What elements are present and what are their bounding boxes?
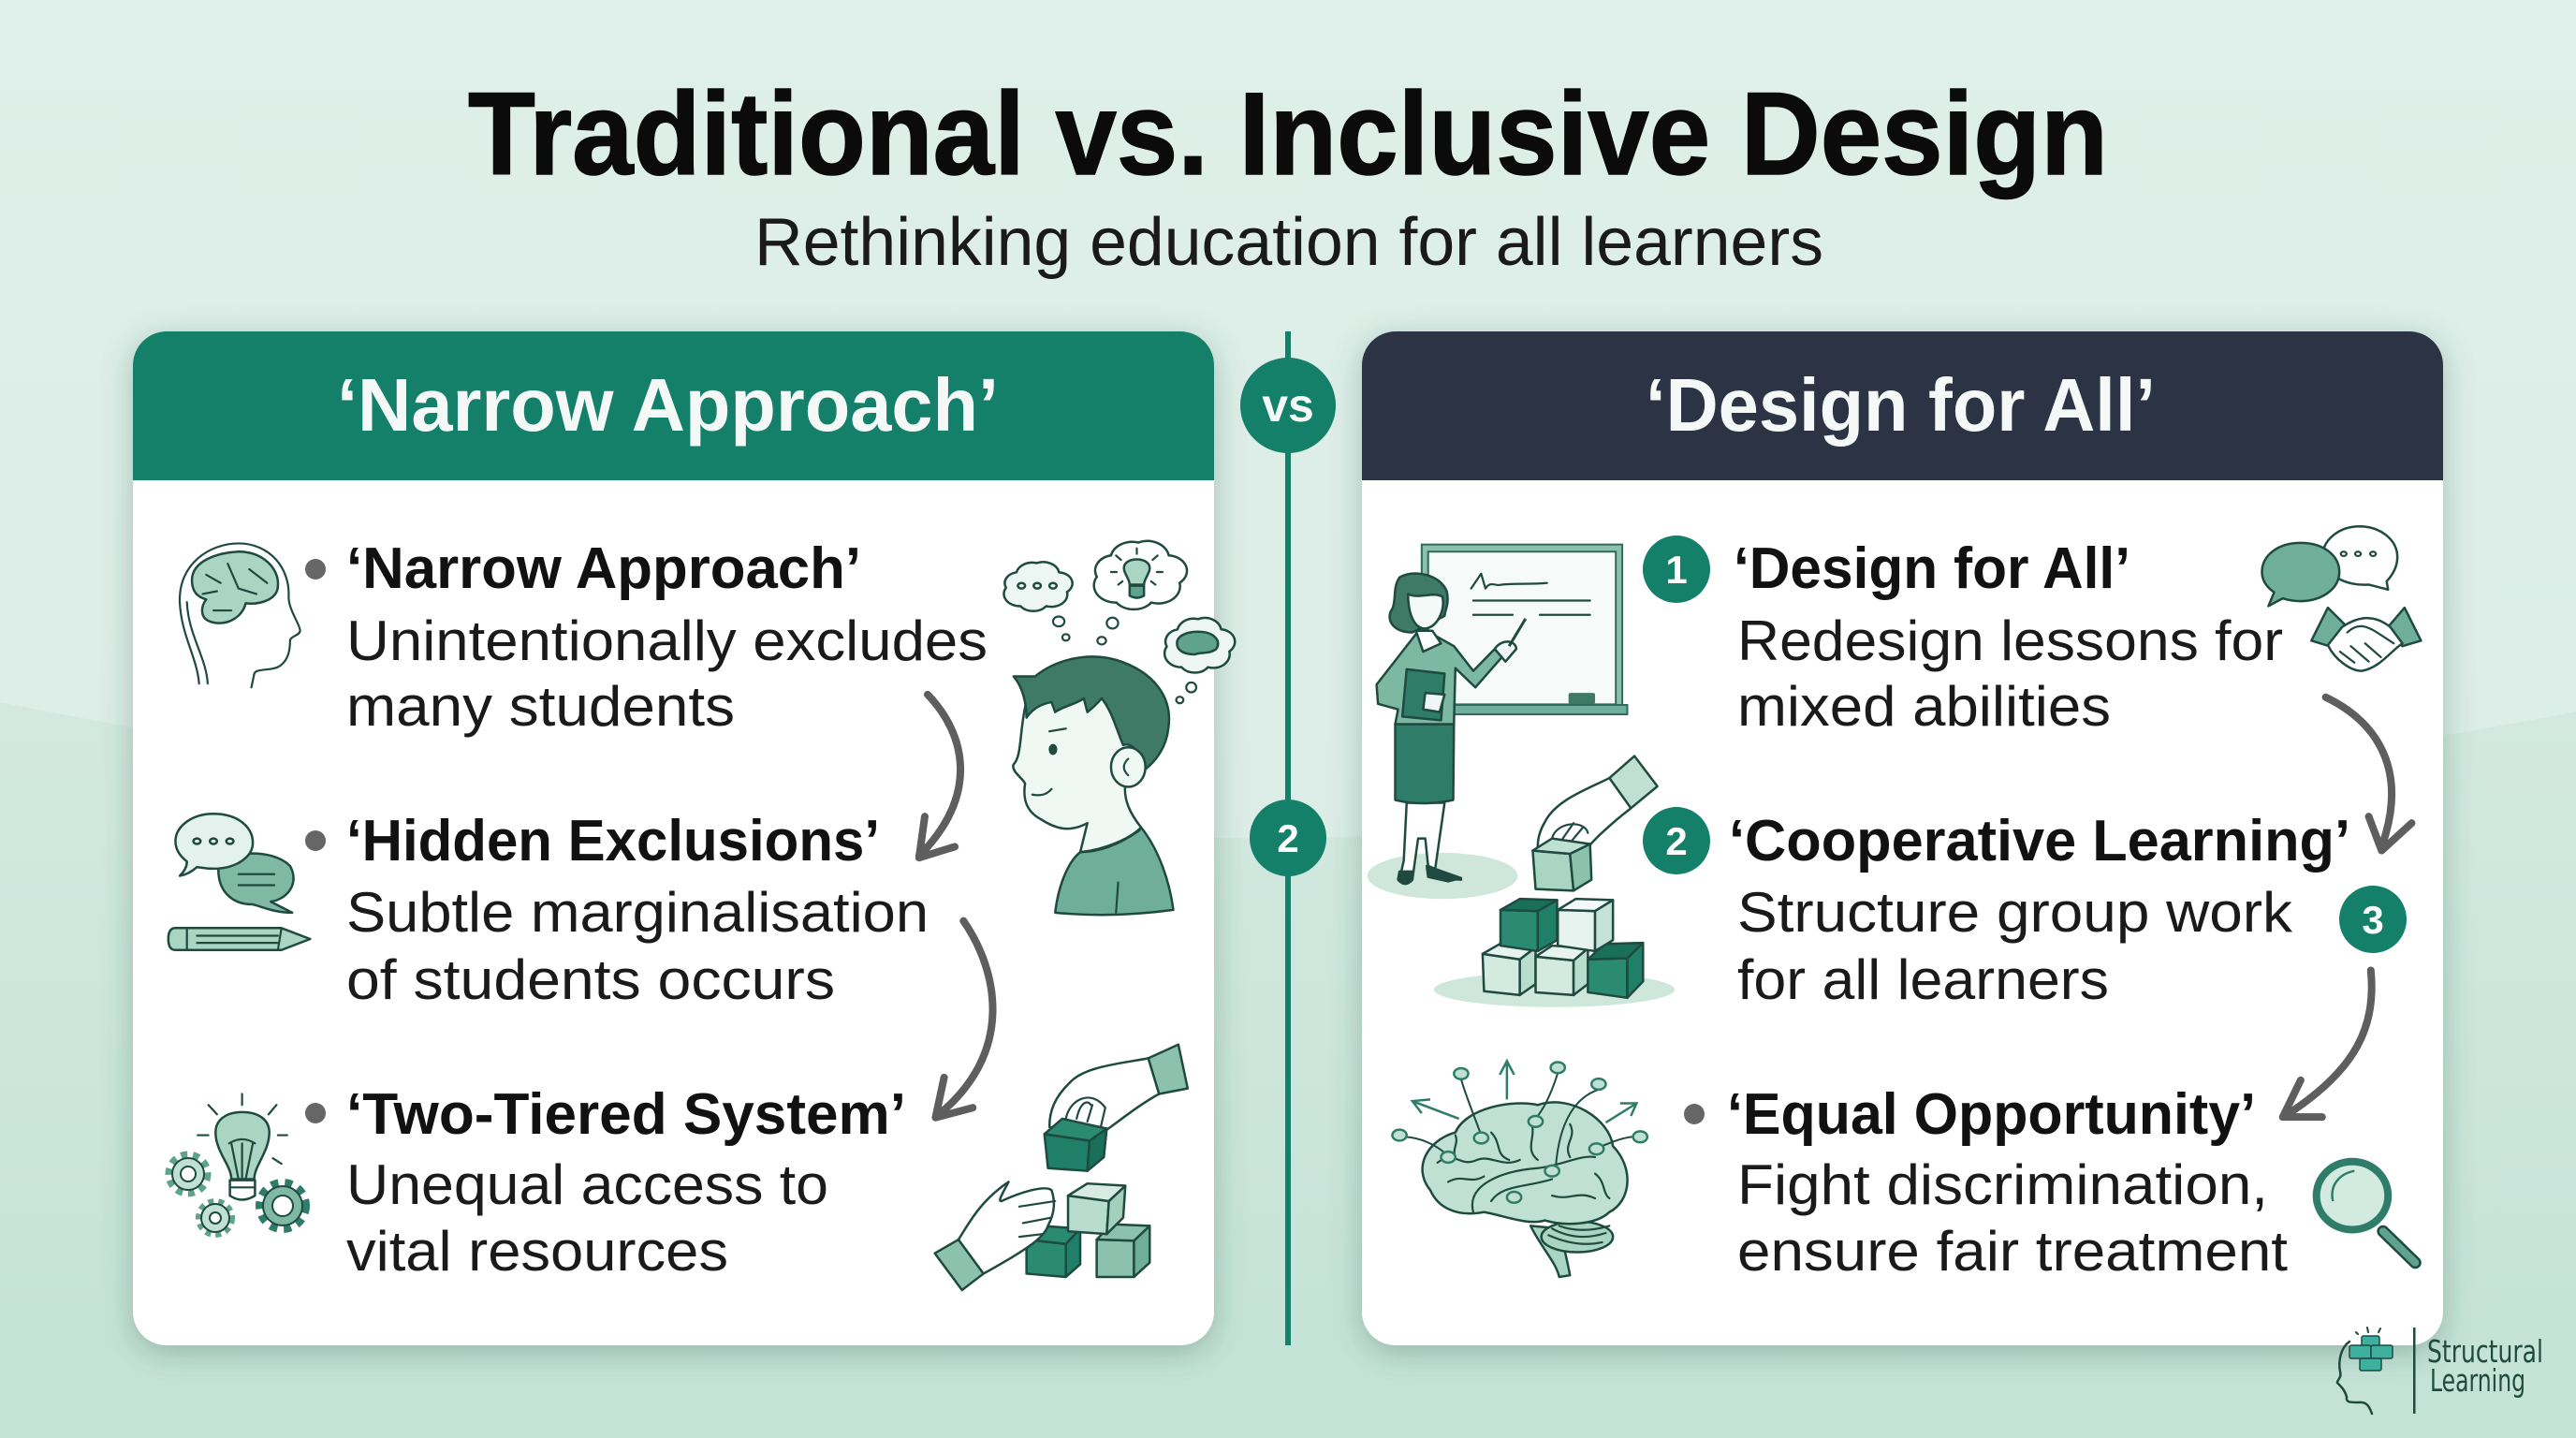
badge: 3 [2339, 886, 2407, 953]
badge: vs: vs [1262, 379, 1314, 432]
icon: thinking boy [1003, 541, 1235, 915]
subtitle: Rethinking education for all learners [754, 205, 1823, 280]
icon: hands and blocks [935, 1045, 1188, 1290]
item: design for all text: Redesign lessons for [1737, 609, 2283, 672]
shirt [1055, 828, 1174, 915]
header: narrow approach: ‘Narrow Approach’ [337, 363, 999, 447]
hair [1014, 656, 1169, 770]
badge: 2 [1250, 800, 1326, 876]
item: design for all text: ‘Design for All’ [1734, 536, 2130, 601]
title: Traditional vs. Inclusive Design [468, 69, 2108, 199]
item: cooperative learning text: for all learners [1737, 948, 2109, 1011]
arrow: narrow step two to three [935, 921, 993, 1118]
item: hidden exclusions text: Subtle marginalisation [346, 881, 929, 944]
item: two-tiered system text: ‘Two-Tiered System’ [346, 1082, 906, 1147]
header: design for all [1362, 331, 2443, 480]
header: design for all: ‘Design for All’ [1646, 363, 2156, 447]
icon: brain with nodes [1392, 1061, 1647, 1277]
item: hidden exclusions text: of students occurs [346, 948, 835, 1011]
logo: structural learning [2337, 1328, 2543, 1414]
icon: head with brain [180, 543, 300, 687]
item: design for all text: 1 [1665, 548, 1688, 592]
icon: speech bubbles and pencil [168, 814, 310, 950]
item: narrow approach text: many students [346, 675, 735, 738]
icon: bulb with gears [168, 1094, 306, 1235]
item: design for all text [1643, 536, 2283, 738]
logo: structural learning: Learning [2430, 1362, 2525, 1399]
item: equal opportunity text: ‘Equal Opportunity’ [1727, 1082, 2256, 1147]
teacher figure [1377, 574, 1526, 884]
arrow: design step one to two [2326, 697, 2411, 851]
connector: centre line [1240, 331, 1336, 1345]
item: equal opportunity text: Fight discrimination, [1737, 1153, 2268, 1216]
icon: hand and stacked blocks [1434, 756, 1675, 1007]
whiteboard [1422, 545, 1627, 714]
badge: 3: 3 [2362, 898, 2384, 942]
item: narrow approach text [305, 536, 988, 738]
header: narrow approach [133, 331, 1214, 480]
item: cooperative learning text: ‘Cooperative Learning’ [1729, 809, 2350, 873]
icon: magnifying glass [2317, 1162, 2415, 1263]
item: hidden exclusions text [305, 809, 929, 1011]
face [1013, 690, 1149, 852]
item: hidden exclusions text: ‘Hidden Exclusions’ [346, 809, 880, 873]
item: narrow approach text: ‘Narrow Approach’ [346, 536, 861, 601]
thought clouds [1003, 541, 1235, 703]
logo: structural learning: Structural [2427, 1333, 2543, 1370]
item: narrow approach text: Unintentionally excludes [346, 609, 988, 672]
item: design for all text: mixed abilities [1737, 675, 2111, 738]
arrow: narrow step one to two [919, 695, 960, 858]
panel: narrow approach [133, 331, 1235, 1345]
item: equal opportunity text: ensure fair treatment [1737, 1220, 2288, 1283]
item: cooperative learning text: Structure group work [1737, 881, 2293, 944]
panel: design for all [1362, 331, 2443, 1345]
badge: 2: 2 [1277, 816, 1299, 860]
item: cooperative learning text: 2 [1665, 819, 1688, 863]
item: cooperative learning text [1643, 807, 2350, 1011]
item: two-tiered system text: Unequal access to [346, 1153, 828, 1216]
badge: vs [1240, 358, 1336, 453]
icon: speech bubbles and handshake [2262, 526, 2421, 671]
item: two-tiered system text: vital resources [346, 1220, 728, 1283]
item: two-tiered system text [305, 1082, 906, 1283]
icon: teacher at whiteboard [1368, 545, 1627, 899]
arrow: design step three to four [2283, 970, 2372, 1117]
item: equal opportunity text [1684, 1082, 2288, 1283]
